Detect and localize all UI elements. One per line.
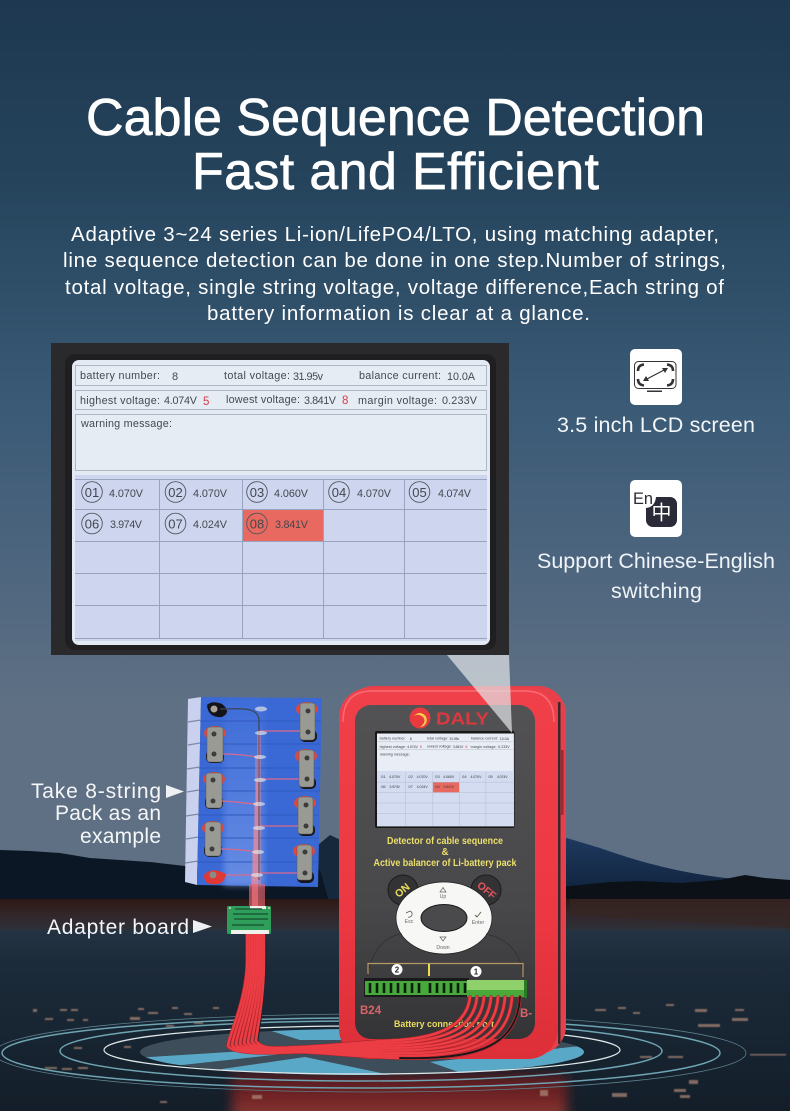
device screen: 10.0A [500, 737, 510, 741]
light beam from device to enlarged screen [447, 655, 512, 733]
device screen: highest voltage: [380, 745, 406, 749]
callout: 8-string pack example: example [80, 825, 161, 848]
DALY logo [410, 708, 489, 728]
title [86, 89, 705, 201]
on and off buttons [388, 875, 501, 905]
cell voltage table: 05 [412, 485, 427, 500]
device grey face [355, 705, 535, 1039]
LCD screen surface [72, 360, 490, 645]
device screen: 02 [408, 774, 413, 779]
adapter board [227, 906, 271, 934]
battery side faces [185, 697, 201, 885]
cell voltage table: 4.074V [438, 488, 472, 500]
description paragraph: Adaptive 3~24 series Li-ion/LifePO4/LTO, using matching adapter, [71, 223, 719, 246]
port labels [360, 1005, 532, 1030]
device rear shell [346, 686, 566, 1054]
device screen: 4.070V [389, 775, 401, 779]
light sparkles on the water [33, 1004, 786, 1103]
device screen [375, 731, 514, 828]
description paragraph [63, 223, 726, 325]
status readouts: 3.841V [304, 395, 337, 407]
cell voltage table: 04 [332, 485, 346, 500]
title: Fast and Efficient [192, 143, 600, 201]
device screen: 4.060V [443, 775, 455, 779]
status readouts: total voltage: [224, 370, 290, 382]
cell voltage table [75, 475, 487, 641]
description paragraph: total voltage, single string voltage, voltage difference,Each string of [65, 276, 724, 299]
label: language support: switching [611, 579, 702, 603]
concentric rings and disc platform [0, 1014, 746, 1092]
status readouts [80, 370, 478, 430]
port labels: Battery connection port [394, 1019, 495, 1030]
device screen: 3.974V [389, 785, 401, 789]
navigation pad: Esc [405, 919, 414, 925]
status readouts: 31.95v [293, 371, 324, 383]
device screen: warning message: [380, 752, 410, 756]
device screen: 8 [410, 737, 412, 741]
cell voltage table: 06 [85, 516, 99, 532]
device product name: Active balancer of Li-battery pack [374, 858, 517, 869]
red measuring device [339, 686, 566, 1059]
device screen: lowest voltage: [427, 745, 452, 748]
enlarged LCD screen panel [51, 343, 509, 655]
device screen: 4.070V [470, 775, 482, 779]
device screen: total voltage: [427, 737, 448, 741]
device screen: balance current: [471, 737, 498, 741]
navigation pad [396, 882, 492, 954]
cell voltage table: 4.070V [357, 488, 392, 500]
icon: English Chinese switching: En [633, 489, 653, 508]
battery bus bars [205, 703, 315, 880]
port labels: B- [520, 1008, 532, 1020]
device screen: battery number: [380, 737, 406, 741]
connector arc outline [367, 934, 524, 976]
navigation pad: Up [440, 894, 446, 900]
status readouts: highest voltage: [80, 395, 160, 407]
background: reflection glow [232, 1074, 567, 1111]
device screen: 8 [465, 745, 467, 749]
status readouts: 4.074V [164, 395, 198, 407]
device screen: 03 [435, 774, 440, 779]
disc platform [135, 1029, 590, 1076]
arrow: to battery pack [166, 785, 184, 798]
icon: English Chinese switching: 中 [652, 496, 672, 526]
flat cable wires [228, 934, 520, 1058]
on and off buttons: OFF [474, 879, 499, 902]
device top highlight [343, 691, 554, 722]
callout: 8-string pack example: Pack as an [55, 802, 161, 825]
callout: 8-string pack example [31, 780, 184, 848]
device product name: & [441, 847, 449, 858]
cell voltage table: 07 [168, 516, 183, 532]
status readouts: balance current: [359, 370, 441, 382]
status readouts: lowest voltage: [226, 394, 300, 406]
device front shell [339, 688, 558, 1059]
status readouts: 10.0A [447, 371, 476, 383]
cell voltage table: 4.070V [193, 488, 228, 500]
status readouts: margin voltage: [358, 395, 437, 407]
device screen: 05 [488, 774, 494, 779]
cell voltage table: 3.841V [275, 519, 309, 531]
connector group brackets [368, 964, 523, 977]
cell voltage table: 4.060V [274, 488, 309, 500]
device screen: 04 [462, 774, 467, 779]
device screen: 4.024V [417, 785, 428, 789]
device screen: 4.074V [407, 745, 419, 749]
cell voltage table: 4.024V [193, 519, 228, 531]
cell voltage table: 4.070V [109, 488, 144, 500]
on and off buttons: ON [393, 881, 413, 900]
device screen: 07 [408, 784, 413, 789]
status readouts: 8 [342, 395, 348, 407]
device screen: 08 [435, 784, 440, 789]
icon: LCD screen size [630, 349, 682, 405]
cell voltage table: 03 [250, 485, 264, 500]
connector group brackets: 2 [395, 966, 400, 974]
device screen: 3.841V [443, 785, 455, 789]
battery top and bottom terminals [204, 702, 227, 884]
title: Cable Sequence Detection [86, 89, 705, 147]
navigation pad: Down [436, 945, 450, 951]
cell voltage table: 08 [250, 516, 264, 532]
device screen: 3.841V [453, 745, 464, 749]
battery sense wires [221, 731, 300, 875]
connector group brackets: 1 [474, 968, 479, 976]
icon: English Chinese switching [630, 480, 682, 537]
device screen: 01 [381, 774, 386, 779]
description paragraph: line sequence detection can be done in one step.Number of strings, [63, 249, 726, 272]
battery pack [185, 697, 322, 906]
device screen: 4.070V [417, 775, 428, 779]
status readouts: battery number: [80, 370, 160, 382]
status readouts: warning message: [80, 418, 172, 430]
label: language support [537, 549, 775, 603]
device screen: margin voltage: [471, 745, 497, 749]
callout: 8-string pack example: Take 8-string [31, 780, 161, 803]
background: reflective water [0, 899, 790, 1111]
cell voltage table: 02 [168, 485, 183, 500]
device product name [374, 836, 517, 869]
device product name: Detector of cable sequence [387, 836, 503, 847]
status readouts: 8 [172, 371, 178, 383]
device screen: 5 [420, 745, 422, 749]
battery terminal ears and shadows [202, 702, 318, 883]
device screen: 31.95v [449, 737, 459, 741]
cell voltage table: 3.974V [110, 519, 143, 531]
label: language support: Support Chinese-English [537, 549, 775, 573]
green terminal connector [364, 978, 527, 998]
port labels: B24 [360, 1005, 382, 1017]
background: mountains and tree line [0, 835, 790, 905]
callout: adapter board: Adapter board [47, 916, 189, 939]
status readouts: 5 [203, 396, 209, 408]
cell voltage table: 01 [85, 485, 99, 500]
description paragraph: battery information is clear at a glance. [207, 302, 590, 325]
navigation pad: Enter [472, 920, 484, 926]
device screen: 06 [381, 784, 386, 789]
arrow: to adapter board [193, 920, 212, 933]
status readouts: 0.233V [442, 395, 478, 407]
label: LCD screen: 3.5 inch LCD screen [557, 413, 755, 437]
DALY logo: DALY [436, 708, 489, 728]
device screen: 0.233V [498, 745, 510, 749]
battery front face [197, 697, 322, 887]
device screen: 4.074V [497, 775, 508, 779]
adapter wire bundle above board [250, 884, 264, 906]
